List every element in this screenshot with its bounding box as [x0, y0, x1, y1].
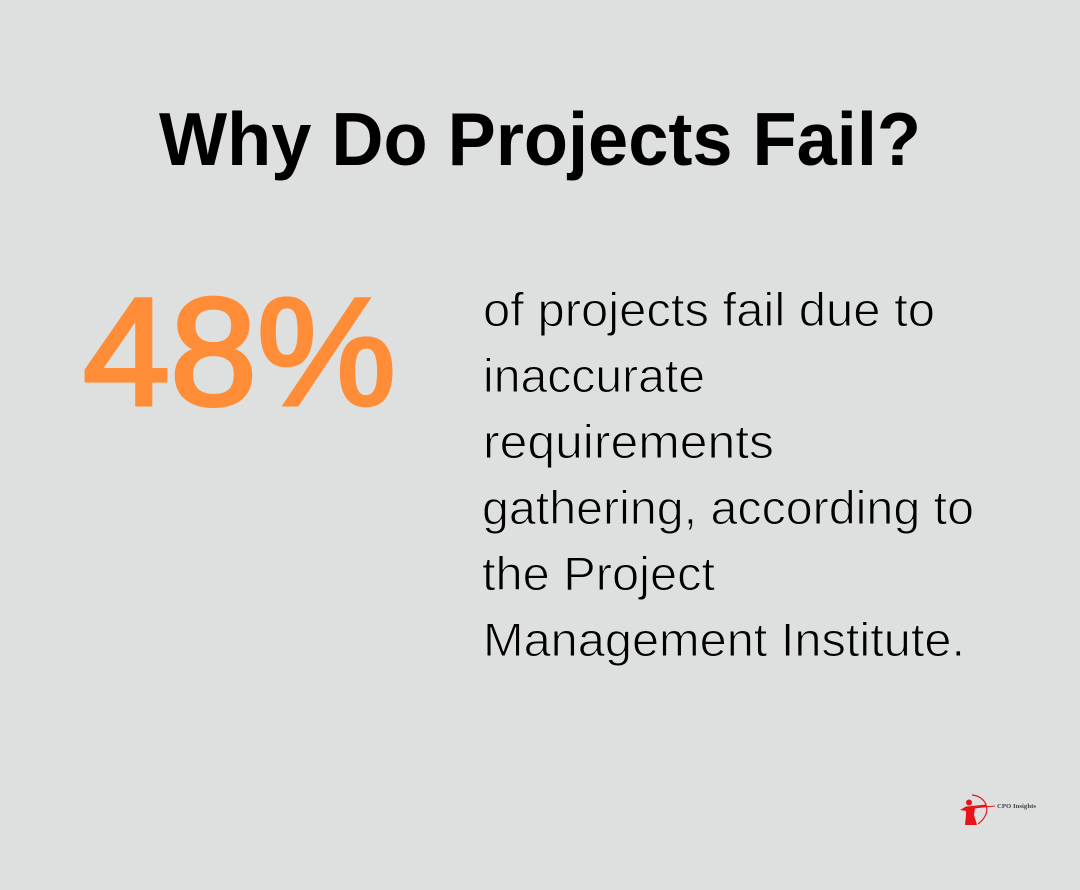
- description text block: gathering, according to: [482, 481, 974, 534]
- logo wordmark: CPO Insights: [997, 803, 1036, 810]
- description text block: the Project: [482, 547, 715, 600]
- big statistic: 48%: 48%: [83, 266, 396, 438]
- description text block: [482, 283, 974, 666]
- logo: CPO Insights: [960, 795, 1036, 825]
- description text block: inaccurate: [483, 349, 705, 402]
- description text block: requirements: [483, 415, 774, 468]
- icon: red archer: [960, 795, 995, 825]
- description text block: of projects fail due to: [483, 283, 935, 336]
- description text block: Management Institute.: [483, 613, 965, 666]
- title: Why Do Projects Fail?: [159, 97, 921, 181]
